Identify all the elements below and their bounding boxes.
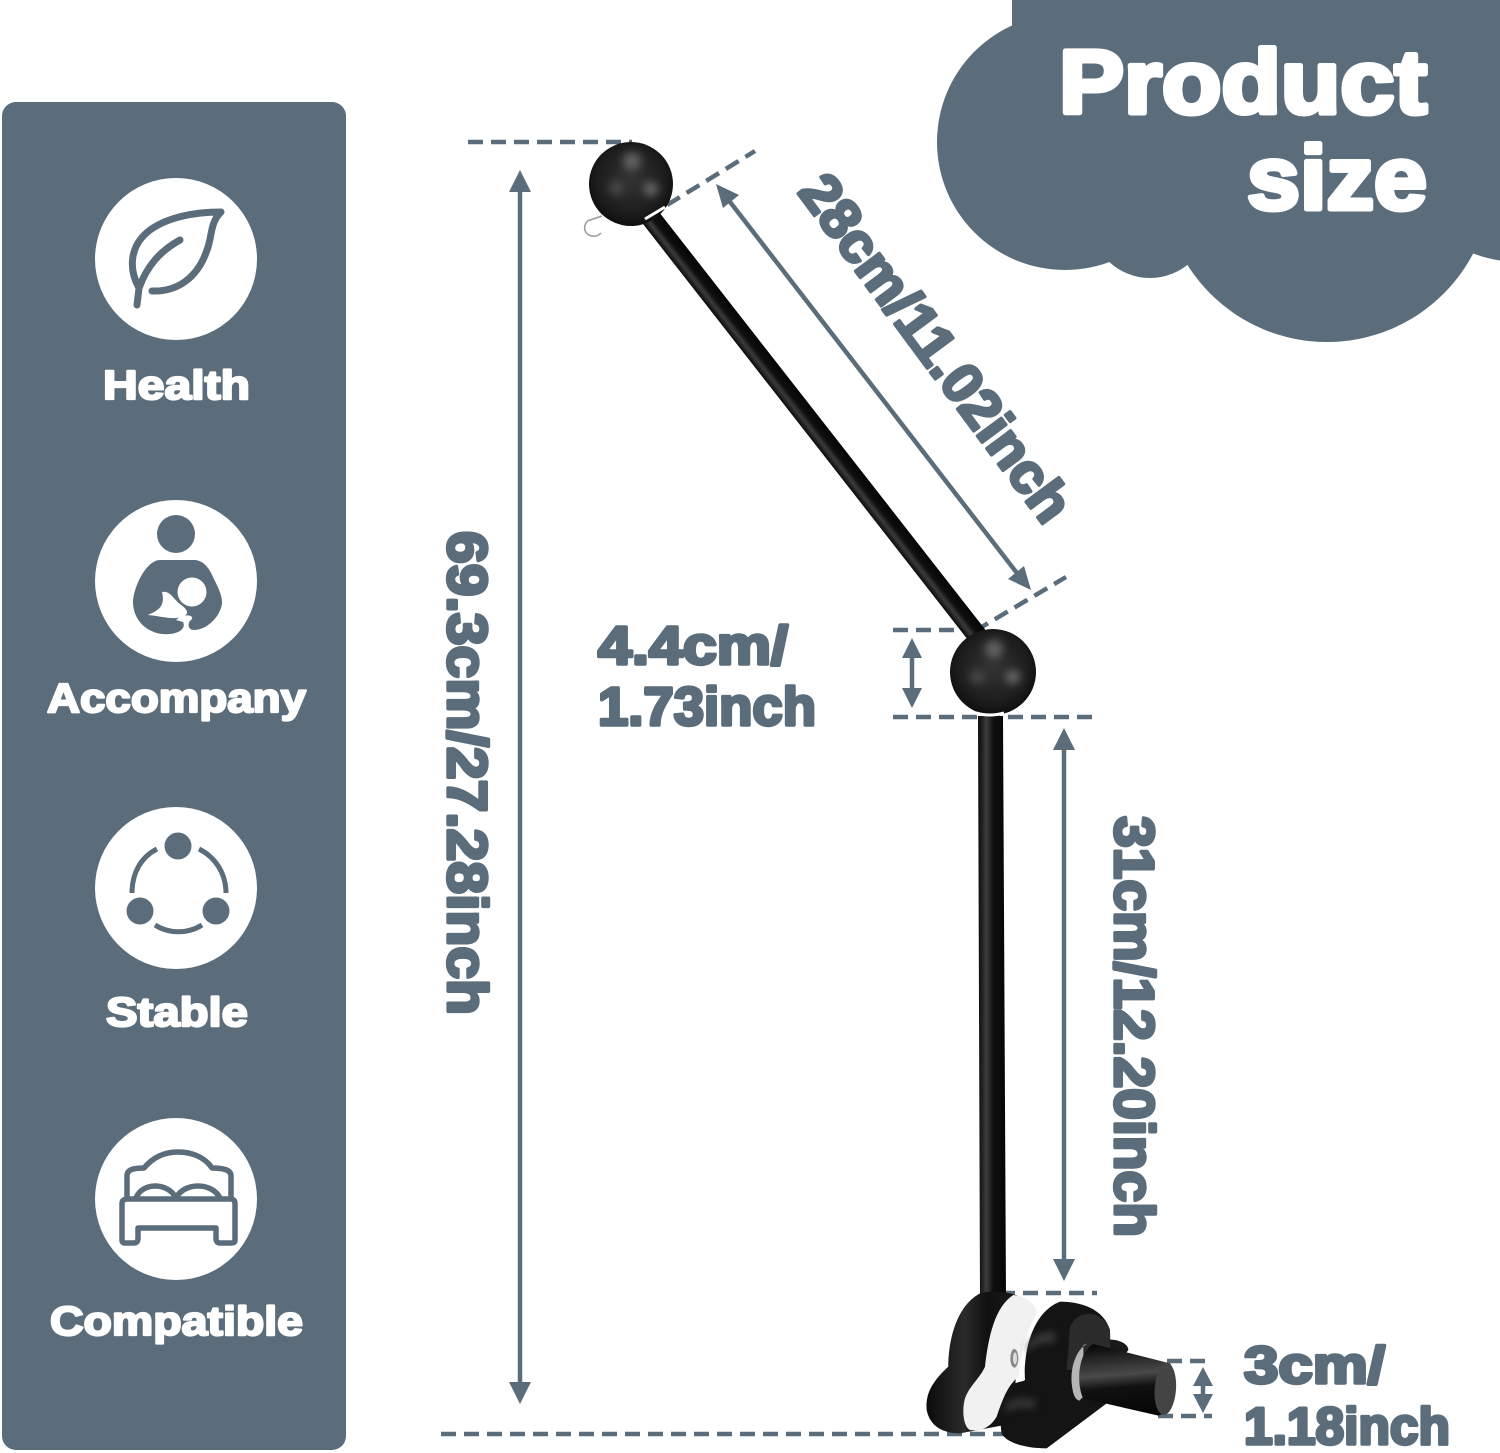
label: Compatible: Compatible	[50, 1298, 303, 1344]
dimension: upper arm length	[716, 162, 1085, 590]
arrow	[902, 638, 922, 708]
label: Health: Health	[103, 362, 250, 408]
icon: leaf	[132, 212, 221, 305]
arrow	[509, 170, 531, 1404]
feature: Stable	[95, 807, 257, 1035]
label: 28cm/11.02inch	[787, 162, 1085, 534]
panel: feature sidebar	[2, 102, 346, 1450]
middle ball joint	[950, 629, 1036, 715]
label: 3cm/	[1244, 1337, 1385, 1395]
dimension: lower rod length	[1053, 728, 1166, 1281]
arrow	[1193, 1367, 1213, 1413]
feature: Accompany	[47, 500, 306, 721]
product: mobile arm	[585, 142, 1178, 1448]
feature: Compatible	[50, 1118, 303, 1344]
heading cloud: Product size	[937, 0, 1500, 342]
upper ball joint	[585, 142, 673, 236]
icon: three linked dots	[126, 832, 230, 932]
label: 69.3cm/27.28inch	[436, 531, 499, 1015]
label: Accompany: Accompany	[47, 675, 306, 721]
arrow	[716, 184, 1031, 590]
icon: bed	[122, 1152, 235, 1243]
label: 4.4cm/	[598, 616, 788, 676]
dimension guides: dashed lines	[441, 142, 1212, 1434]
icon: mother and baby	[133, 515, 222, 634]
title: Product	[1059, 33, 1427, 133]
label: Stable: Stable	[106, 989, 248, 1035]
dimension: ball diameter	[598, 616, 922, 737]
upper diagonal rod	[643, 212, 985, 642]
subtitle: size	[1247, 129, 1427, 229]
lower vertical rod	[978, 716, 1006, 1300]
arrow	[1053, 728, 1075, 1281]
dimension: knob diameter	[1193, 1337, 1450, 1453]
label: 31cm/12.20inch	[1103, 816, 1166, 1237]
clamp base	[926, 1292, 1178, 1448]
dimension: total height	[436, 170, 531, 1404]
feature: Health	[95, 178, 257, 408]
dimension: ball diameter: 1.73inch	[598, 677, 816, 737]
